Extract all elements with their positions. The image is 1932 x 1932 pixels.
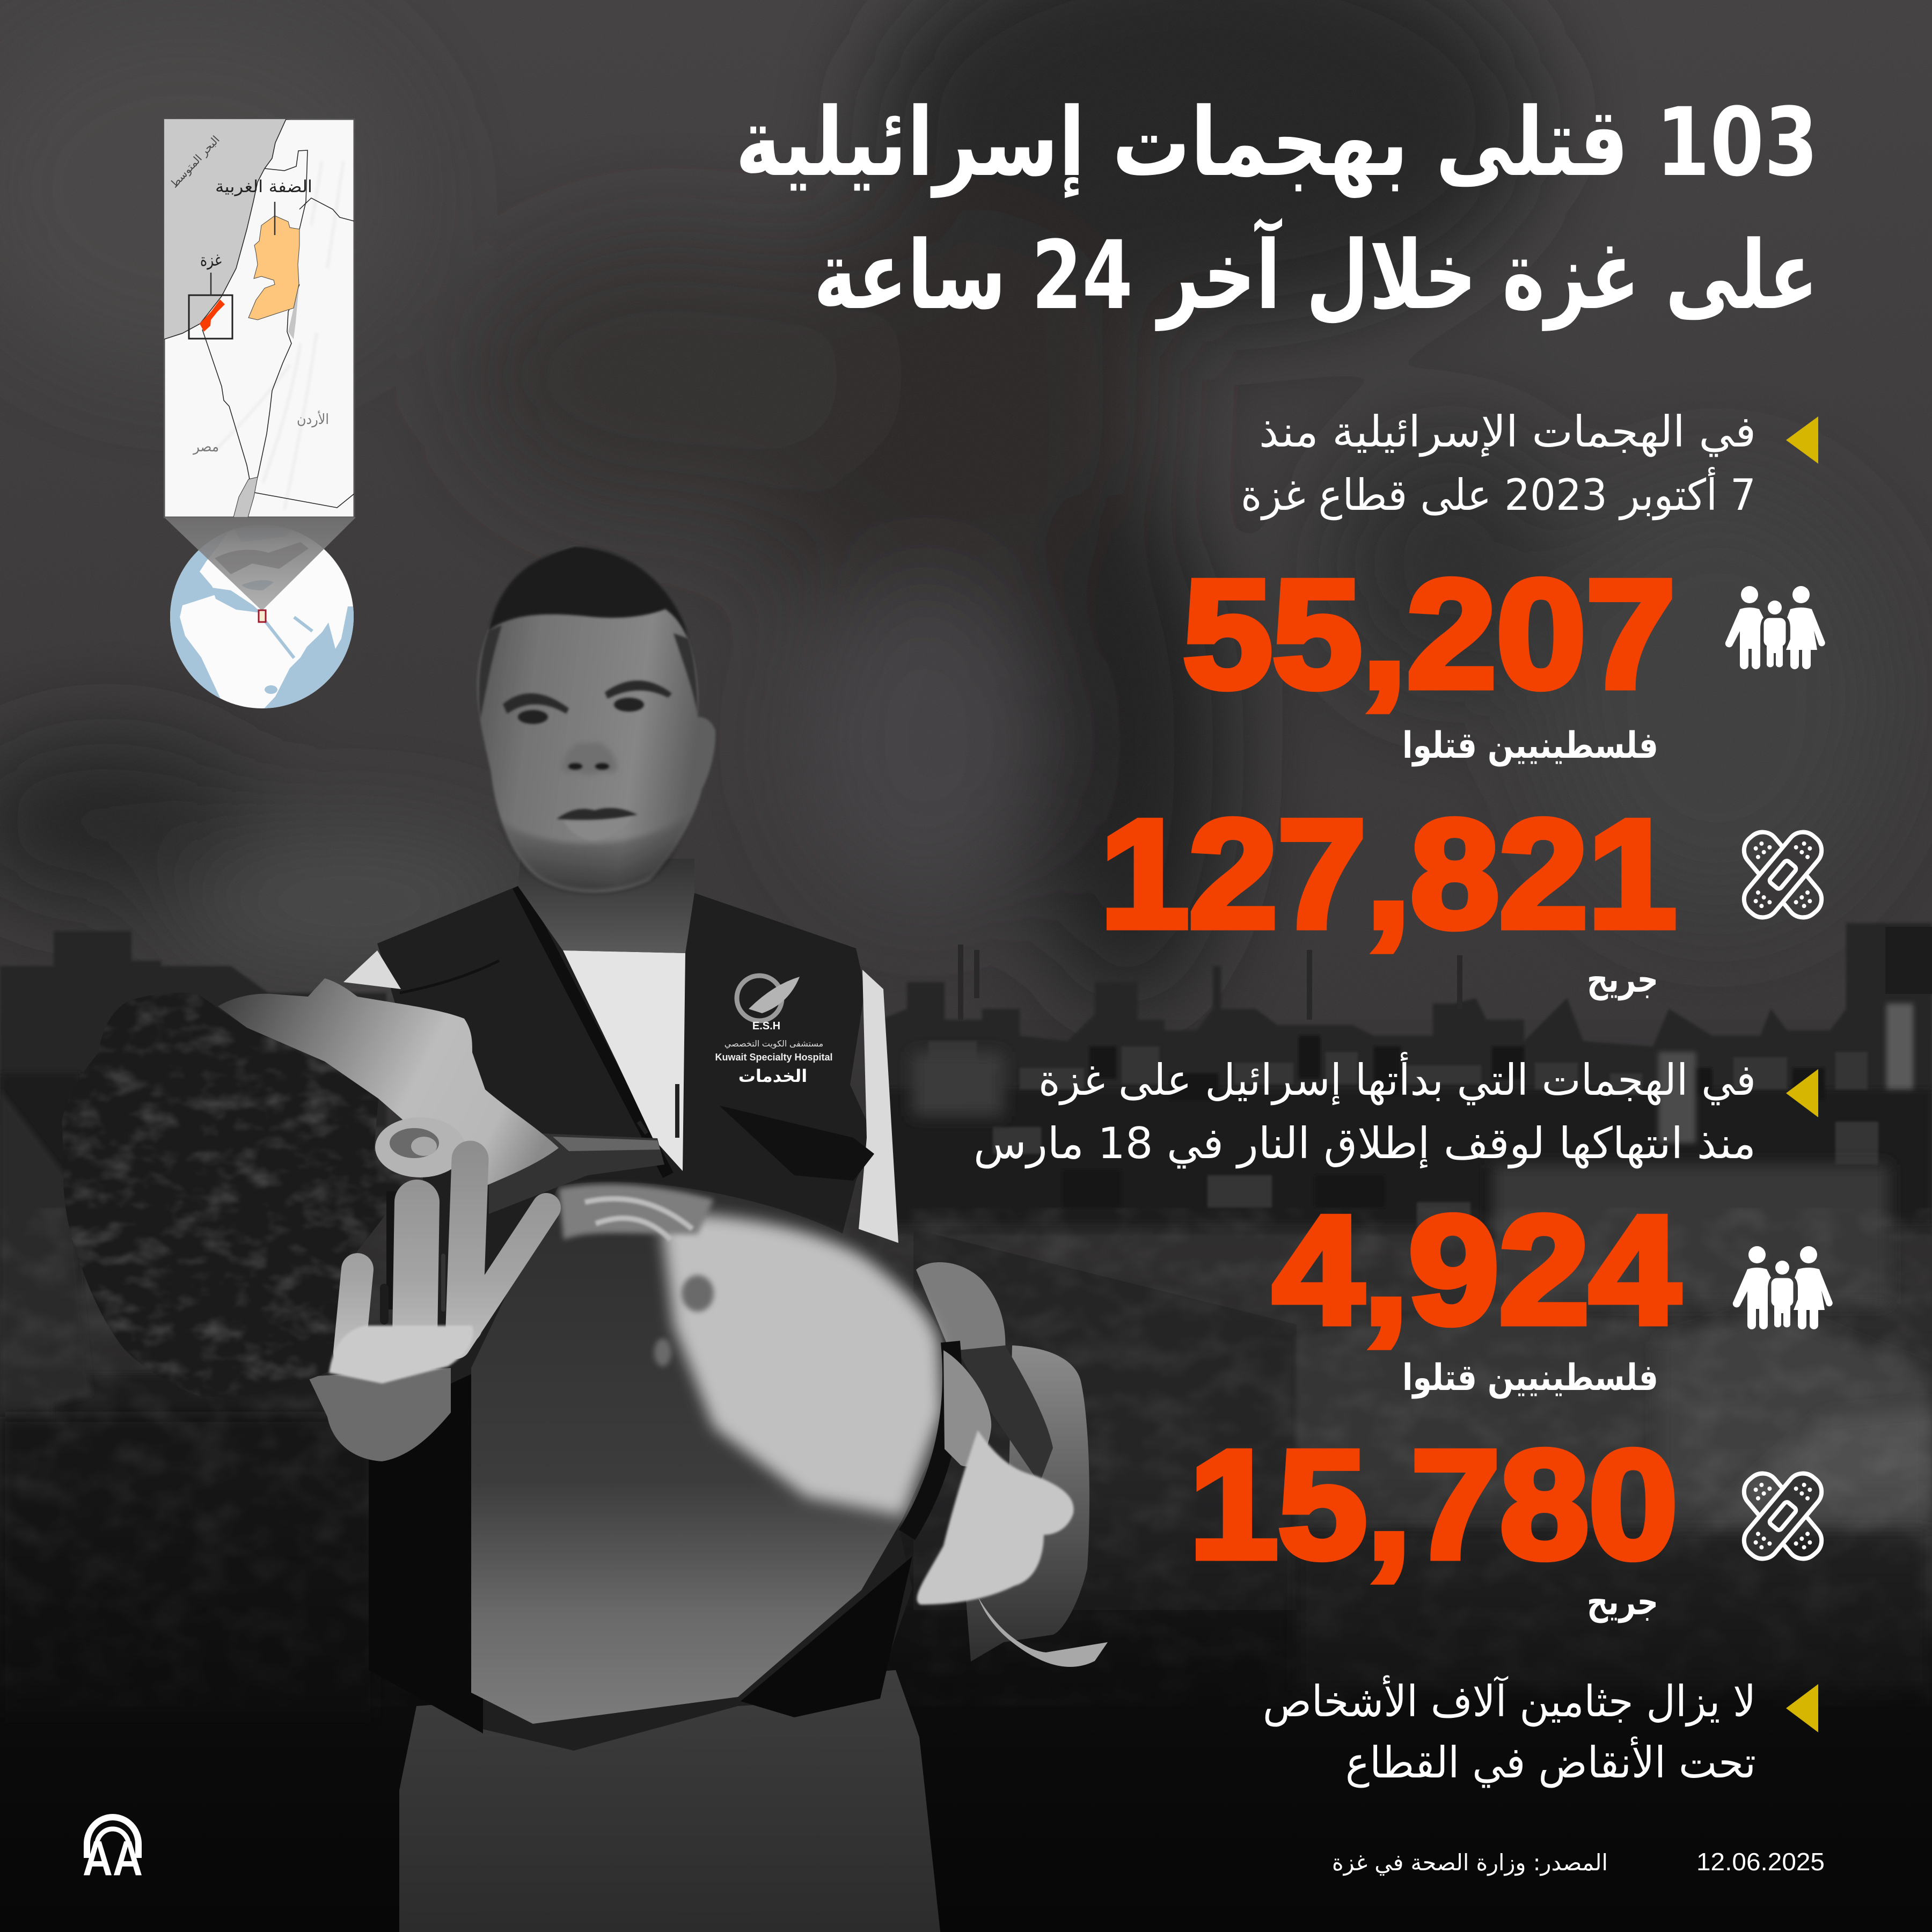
globe locator xyxy=(161,517,365,716)
vest logo: Kuwait Specialty Hospital xyxy=(715,1052,833,1063)
map: label West Bank: الضفة الغربية xyxy=(215,177,312,196)
title: 103 قتلى بهجمات إسرائيلية xyxy=(735,87,1818,198)
boy: shorts xyxy=(957,1345,1053,1483)
stat: 55,207 killed xyxy=(1183,548,1825,767)
skyline xyxy=(0,923,1932,1234)
globe: funnel from map xyxy=(164,517,356,611)
number: 15,780 xyxy=(1189,1418,1678,1590)
map: label Egypt: مصر xyxy=(192,439,219,455)
man: neck xyxy=(518,859,694,953)
label: فلسطينيين قتلوا xyxy=(1402,724,1658,767)
man: vest xyxy=(369,886,912,1751)
section text: تحت الأنقاض في القطاع xyxy=(1345,1736,1756,1788)
number: 55,207 xyxy=(1183,548,1675,720)
label: جريح xyxy=(1587,1581,1658,1623)
map: sea xyxy=(164,119,286,339)
date: 12.06.2025 xyxy=(1696,1848,1825,1876)
section text xyxy=(1241,407,1756,521)
section text: لا يزال جثامين آلاف الأشخاص xyxy=(1263,1675,1756,1727)
boy: collar xyxy=(489,1133,664,1214)
arrow marker xyxy=(1786,1684,1818,1732)
man: trousers xyxy=(399,1670,940,1932)
vest logo: مستشفى الكويت التخصصي xyxy=(724,1040,823,1049)
arrow marker xyxy=(1786,416,1818,464)
section text xyxy=(1263,1675,1756,1788)
stat: 15,780 wounded xyxy=(1189,1418,1828,1623)
man: hand holding boy's head xyxy=(329,1159,546,1384)
icon: family xyxy=(1733,1246,1833,1329)
section text: منذ انتهاكها لوقف إطلاق النار في 18 مارس xyxy=(974,1118,1756,1169)
globe: land seen through funnel xyxy=(215,542,309,574)
title xyxy=(735,87,1818,331)
boy: ear xyxy=(375,1117,465,1177)
map: label Gaza: غزة xyxy=(200,251,222,270)
map: Gaza Strip xyxy=(200,299,225,332)
section: bodies under rubble xyxy=(1263,1675,1818,1788)
locator map panel xyxy=(164,115,354,517)
man: carrying arm and strap xyxy=(907,1342,952,1535)
boy: face and neck xyxy=(218,978,559,1186)
man: face xyxy=(477,546,715,892)
lower city xyxy=(1492,1165,1889,1304)
man: hand under boy's legs xyxy=(917,1430,1074,1605)
boy: shirt xyxy=(471,1182,950,1724)
section: since ceasefire violation xyxy=(974,1052,1818,1169)
map: label Mediterranean: البحر المتوسط xyxy=(167,133,222,191)
stat: 127,821 wounded xyxy=(1100,788,1828,1001)
map: West Bank xyxy=(248,216,299,320)
map: label leader lines xyxy=(211,202,275,295)
logo: Anadolu Agency: AA xyxy=(83,1831,143,1886)
icon: crossed bandages xyxy=(1738,825,1828,924)
globe: red locator box xyxy=(259,610,266,622)
man: facial features xyxy=(503,680,672,840)
stat: 4,924 killed xyxy=(1273,1184,1833,1399)
globe: oceans xyxy=(161,521,365,716)
section text: في الهجمات التي بدأتها إسرائيل على غزة xyxy=(1038,1052,1756,1106)
man: sleeves xyxy=(343,950,898,1243)
boy: upper leg xyxy=(916,1262,1005,1352)
man: white t-shirt xyxy=(563,950,685,1171)
arrow marker xyxy=(1786,1069,1818,1117)
photo: rescuer carrying a wounded child xyxy=(62,546,1108,1932)
label: جريح xyxy=(1587,958,1658,1001)
map: label Jordan: الأردن xyxy=(297,410,329,428)
vest pocket xyxy=(719,1106,874,1181)
section text: 7 أكتوبر 2023 على قطاع غزة xyxy=(1241,467,1756,521)
boy: curly hair xyxy=(62,993,407,1397)
man: hair xyxy=(479,546,698,719)
label: فلسطينيين قتلوا xyxy=(1402,1357,1658,1399)
number: 127,821 xyxy=(1100,788,1677,960)
vest logo: E.S.H xyxy=(752,1020,780,1032)
map: Gaza inset box xyxy=(189,295,232,339)
man: forearm xyxy=(308,1368,451,1461)
vest logo xyxy=(715,976,833,1086)
boy: lower leg xyxy=(966,1345,1089,1662)
icon: crossed bandages xyxy=(1738,1467,1828,1565)
icon: family xyxy=(1725,586,1825,669)
section: total since 7 October xyxy=(1241,407,1818,521)
logo: Anadolu Agency xyxy=(83,1817,143,1886)
number: 4,924 xyxy=(1273,1184,1681,1356)
source: المصدر: وزارة الصحة في غزة xyxy=(1332,1849,1608,1876)
vest logo: الخدمات xyxy=(738,1066,807,1086)
section text: في الهجمات الإسرائيلية منذ xyxy=(1259,407,1756,457)
section text xyxy=(974,1052,1756,1169)
